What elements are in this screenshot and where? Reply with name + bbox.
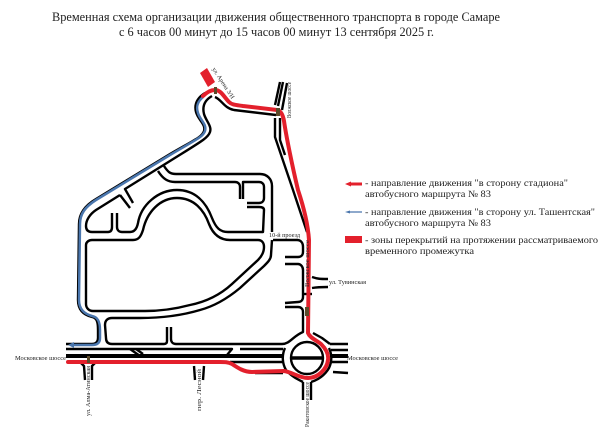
legend: closure text: временного промежутка — [365, 246, 475, 257]
legend: red route text — [365, 178, 568, 200]
road labels: ул. Арена 3/Н — [210, 67, 235, 101]
road labels: пер. Лесной — [196, 368, 203, 411]
title: Временная схема организации движения общественного транспорта в городе Самаре — [52, 10, 500, 24]
road labels: Волжское шоссе — [287, 82, 293, 118]
title: с 6 часов 00 минут до 15 часов 00 минут 13 сентября 2025 г. — [119, 25, 434, 39]
road labels: 10-й проезд — [269, 232, 300, 239]
bus stop markers — [87, 87, 309, 363]
road labels: Волжское шоссе — [305, 240, 311, 287]
legend: closure text — [365, 235, 598, 257]
road labels: Московское шоссе — [15, 356, 66, 362]
road labels: Московское шоссе — [347, 356, 398, 362]
road network — [66, 82, 348, 400]
legend — [345, 178, 598, 257]
red route — [68, 90, 328, 378]
legend: red route text: - направление движения "в сторону стадиона" — [365, 178, 568, 189]
legend: red arrow — [345, 182, 362, 186]
legend: closure text: - зоны перекрытий на протяжении рассматриваемого — [365, 235, 598, 246]
legend: blue arrow — [345, 210, 362, 214]
road labels: Ракитовское шоссе — [305, 382, 311, 427]
legend: blue route text: - направление движения "в сторону ул. Ташентская" — [365, 207, 595, 218]
blue route — [68, 97, 205, 348]
road labels: ул. Тувинская — [329, 280, 366, 286]
legend: red rectangle — [345, 236, 362, 243]
legend: red route text: автобусного маршрута № 83 — [365, 189, 491, 200]
road labels — [15, 67, 398, 427]
road labels: ул. Алма-Атинская — [86, 366, 92, 416]
title — [52, 10, 500, 39]
legend: blue route text: автобусного маршрута № 83 — [365, 218, 491, 229]
legend: blue route text — [365, 207, 595, 229]
closure zone: top — [200, 68, 215, 87]
